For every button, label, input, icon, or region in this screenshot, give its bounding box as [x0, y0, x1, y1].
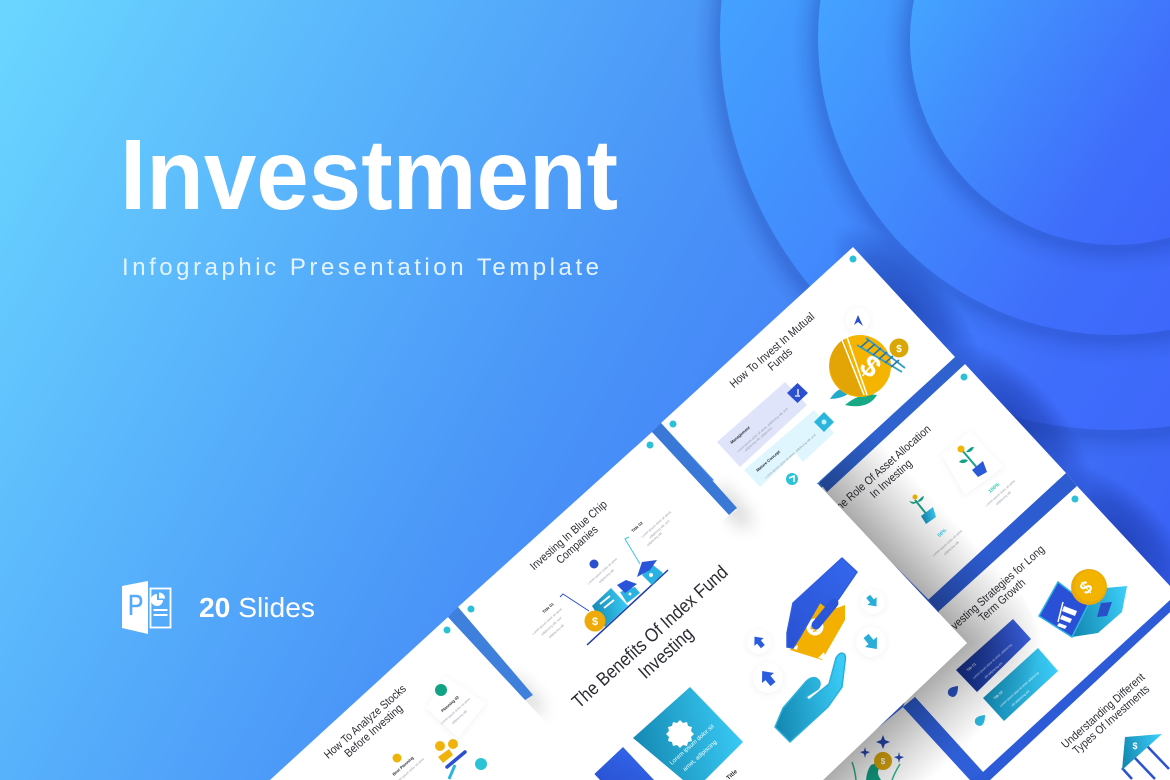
card: plant 50%: 50% — [937, 527, 948, 539]
card: plant 100%: adipiscing elit — [995, 490, 1012, 506]
concentric circles — [694, 0, 1170, 460]
icon: houses and coin: $ — [592, 616, 598, 628]
icon: badge — [666, 720, 694, 748]
label: title 02: Lorem ipsum dolor sit amet, — [640, 510, 672, 539]
icon: coins and growth — [435, 739, 465, 779]
icon: PowerPoint — [122, 581, 170, 634]
icon: coin with ladder: $ — [896, 344, 902, 355]
heading: types of investments: Types Of Investments — [1071, 683, 1153, 757]
panel: slide B asset allocation — [819, 364, 1077, 613]
label: title 01: Lorem ipsum dolor sit amet, — [531, 607, 563, 636]
shadow: main slide — [818, 433, 1045, 780]
heading: benefits of index fund: The Benefits Of Index Fund — [568, 561, 732, 712]
card: plant 50%: adipiscing elit — [943, 540, 960, 556]
heading: analyze stocks: How To Analyze Stocks — [322, 682, 409, 762]
icon: stars — [860, 735, 904, 763]
heading: asset allocation: The Role Of Asset Allocation — [829, 423, 934, 517]
icon: arrows — [747, 590, 886, 693]
icon: money — [790, 602, 845, 660]
card: plant 100%: 100% — [988, 481, 1002, 495]
panel: slide D analyze stocks — [270, 607, 600, 780]
icon: green figure with coin: $ — [881, 757, 886, 766]
icon: book with coin — [1039, 569, 1127, 637]
card: plant 50%: Lorem ipsum dolor sit amet — [932, 529, 963, 557]
card: navy: Title 01 — [966, 662, 977, 673]
card: cyan — [983, 648, 1058, 721]
shadow: strip onto slide C — [510, 680, 540, 712]
label: title 02: Title 02 — [630, 520, 644, 533]
icon: green figure with coin — [852, 752, 900, 780]
card: cyan: Lorem ipsum dolor sit amet, adipiscing — [999, 671, 1040, 708]
card: management — [717, 382, 808, 467]
icon: coin with ladder: $ — [853, 349, 887, 385]
heading: asset allocation: In Investing — [868, 457, 915, 501]
heading: mutual funds: Funds — [766, 345, 796, 374]
label: title 01: Title 01 — [541, 601, 555, 614]
panel: slide E long term growth — [903, 486, 1170, 780]
label: title 02: adipiscing elit — [646, 531, 663, 547]
icon: bank: $ — [1132, 741, 1138, 751]
card: plant 100%: Lorem ipsum dolor sit amet — [985, 479, 1016, 507]
card: mature concept: Mature Concept — [755, 449, 782, 473]
card: teal: Lorem ipsum dolor sit — [669, 724, 716, 767]
card: management: Lorem ipsum dolor sit amet, adipiscing elit, sed — [736, 407, 789, 453]
panel: slide C blue chip: Lorem ipsum dolor sit amet — [587, 557, 618, 585]
card: mature concept — [744, 410, 834, 487]
heading: types of investments: Understanding Different — [1059, 671, 1148, 751]
card: blue — [588, 747, 654, 780]
card: planning 02 — [427, 676, 486, 738]
card: teal — [633, 687, 743, 780]
icon: cyan nav button — [475, 758, 487, 770]
heading: benefits of index fund: Investing — [634, 623, 697, 683]
card: navy: Lorem ipsum dolor sit amet, adipiscing — [972, 643, 1013, 680]
icon: cyan nav button — [786, 473, 798, 485]
panel: main slide index fund — [400, 480, 967, 780]
panel: slide A mutual funds — [661, 247, 955, 533]
card: best planning: Best Planning — [391, 755, 415, 777]
label: title 01: adipiscing elit, sed — [540, 616, 563, 636]
panel: slide C blue chip — [458, 423, 737, 700]
subtitle: Infographic Presentation Template — [122, 254, 599, 281]
label: title 01: adipiscing elit — [548, 623, 565, 639]
icon: houses and coin — [584, 560, 668, 645]
slide shadows on background — [809, 203, 1170, 630]
icon: giving hand — [787, 558, 857, 648]
icon: coin with ladder — [829, 335, 908, 406]
heading: growth strategies: Term Growth — [976, 577, 1028, 625]
card: management: adipiscing elit, adipiscing — [744, 426, 773, 452]
icon: book with coin: $ — [1076, 577, 1096, 598]
panel: slide G plant — [815, 707, 970, 780]
icon: receiving hand — [775, 653, 846, 742]
slide count label: 20 Slides — [199, 592, 315, 623]
icon: blue arrow badge — [846, 308, 870, 332]
card: navy — [956, 619, 1031, 692]
heading: blue chip: Investing In Blue Chip — [528, 498, 610, 573]
card: cyan: Title 02 — [993, 690, 1004, 701]
strip: slide A lower band — [818, 357, 965, 492]
card: planning 02: Lorem ipsum dolor sit amet — [440, 697, 471, 725]
card: management: Management — [729, 425, 751, 445]
card: mature concept: Lorem ipsum dolor sit amet, adipiscing elit, sed — [764, 433, 817, 479]
shadow: strip onto slide A — [718, 490, 748, 525]
title: Investment — [120, 119, 618, 231]
card: cyan: elit adipiscing elit — [1011, 689, 1030, 707]
icon: drops — [948, 686, 985, 726]
card: planning 02: Planning 02 — [440, 694, 461, 713]
panel: slide C blue chip: adipiscing elit — [598, 568, 615, 584]
card: navy: elit adipiscing elit — [984, 661, 1003, 679]
heading: growth strategies: Investing Strategies for Long — [942, 543, 1047, 638]
panel: slide F types of investments — [970, 600, 1170, 780]
card: plant 50% — [909, 494, 963, 557]
strip — [903, 697, 983, 780]
icon: money: $ — [809, 623, 820, 635]
card: planning 02: adipiscing elit — [451, 709, 468, 725]
icon: bank — [1122, 734, 1169, 779]
label: title 02: adipiscing elit, sed — [648, 519, 671, 539]
card: teal: amet, adipiscing — [682, 740, 718, 773]
icon: gear — [590, 560, 598, 568]
heading: blue chip: Companies — [554, 523, 601, 567]
heading: mutual funds: How To Invest In Mutual — [728, 310, 817, 391]
label: title 02 — [625, 510, 672, 564]
label: title 01 — [531, 594, 589, 639]
heading: analyze stocks: Before Investing — [342, 702, 405, 760]
card: plant 100% — [942, 431, 1016, 507]
